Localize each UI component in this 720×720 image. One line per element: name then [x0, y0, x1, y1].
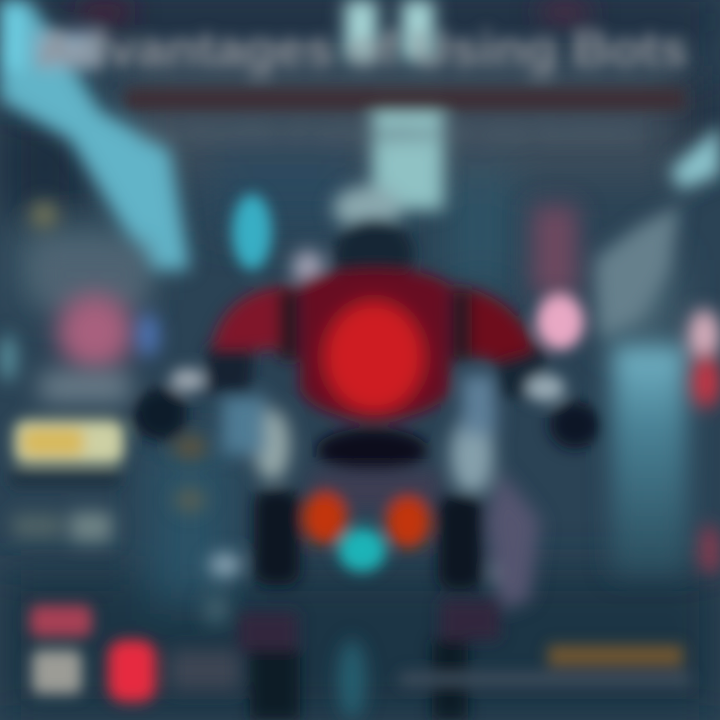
- blue blob: [136, 313, 160, 357]
- robot: [139, 186, 601, 720]
- pink blob: [57, 294, 133, 370]
- bottom caption: [170, 650, 240, 690]
- title: Advantages of Using Bots: [38, 21, 688, 77]
- bottom-right call to action: [400, 645, 690, 686]
- robot right knee light: [386, 496, 430, 548]
- robot torso: [300, 268, 450, 420]
- teal column: [612, 345, 687, 575]
- robot waist: [316, 428, 428, 472]
- robot hands: [139, 368, 601, 449]
- icon: red and grey card: [30, 605, 92, 694]
- orange label: [548, 645, 683, 667]
- robot cyan light: [338, 528, 386, 572]
- grey card: [38, 245, 148, 305]
- yellow button caption: [10, 472, 120, 486]
- pink glow panel: [532, 205, 720, 576]
- left panel: icons: [10, 201, 208, 542]
- robot legs: [238, 490, 500, 720]
- robot head: [334, 220, 414, 288]
- subtitle: Key benefits of automation for your business: [140, 123, 640, 145]
- small gold marker: [30, 201, 58, 229]
- robot chest core: [324, 301, 424, 413]
- footer text: [400, 672, 690, 686]
- top accents: [75, 0, 593, 24]
- cyan shape: [232, 194, 272, 270]
- title: [35, 21, 688, 110]
- icon: bright red card: [108, 640, 156, 702]
- bottom-left icons: [30, 605, 240, 702]
- mid highlights: [205, 375, 540, 623]
- robot hips: [310, 470, 440, 510]
- caption text blocks: [12, 435, 208, 542]
- grey patch: [40, 372, 130, 402]
- light beams: [0, 0, 720, 382]
- robot head glow: [333, 186, 401, 230]
- robot forearms: [205, 345, 545, 398]
- robot lower cyan trace: [338, 640, 366, 720]
- yellow button: [14, 420, 124, 464]
- dark blob: [134, 391, 182, 439]
- robot shoulders and arms: [212, 285, 535, 362]
- robot left knee light: [303, 492, 347, 544]
